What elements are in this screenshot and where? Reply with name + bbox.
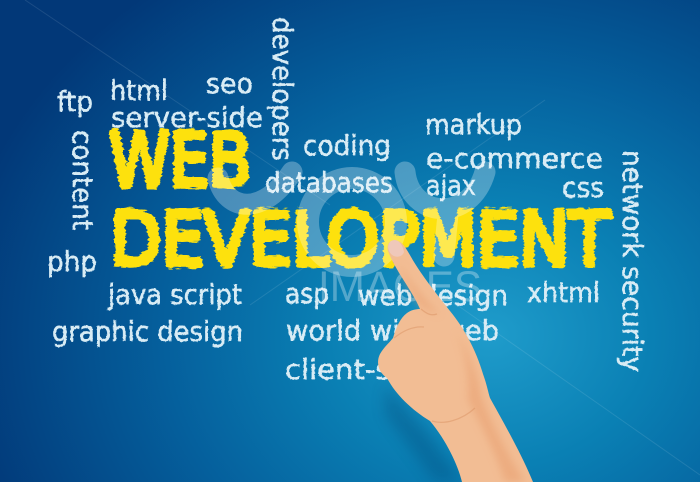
term: server-side: server-side	[111, 101, 263, 134]
term: xhtml: xhtml	[527, 276, 600, 309]
heading: WEB: WEB	[109, 118, 251, 204]
icon: pointing hand	[378, 240, 533, 482]
watermark letter J	[218, 172, 292, 204]
term: developers: developers	[266, 17, 299, 161]
term: content: content	[66, 130, 99, 230]
knuckle creases	[394, 309, 475, 422]
watermark logo	[218, 172, 485, 311]
term: css: css	[562, 171, 604, 204]
term: php: php	[47, 245, 97, 278]
heading: DEVELOPMENT: DEVELOPMENT	[110, 197, 611, 283]
hand shadow	[385, 385, 462, 482]
watermark letter Y	[405, 172, 485, 256]
term: web design: web design	[358, 279, 508, 312]
hand shading	[398, 262, 525, 482]
watermark text: IMAGES	[318, 263, 482, 311]
term: coding: coding	[303, 129, 391, 162]
term: client-side: client-side	[285, 353, 435, 386]
term: graphic design: graphic design	[52, 315, 243, 348]
term: java script: java script	[107, 278, 242, 311]
term: seo: seo	[206, 67, 253, 100]
term: ajax: ajax	[426, 169, 476, 202]
term: markup: markup	[425, 108, 522, 141]
term: databases: databases	[265, 166, 393, 199]
hand and arm	[378, 240, 533, 482]
term: html: html	[110, 74, 168, 107]
term: asp: asp	[285, 277, 329, 310]
term: world wide web: world wide web	[286, 314, 499, 347]
watermark letter O	[308, 178, 396, 266]
term: e-commerce: e-commerce	[426, 142, 603, 175]
term: network security: network security	[616, 150, 649, 372]
word cloud: related terms	[47, 17, 649, 386]
fingernail	[388, 240, 404, 257]
term: ftp: ftp	[57, 85, 93, 118]
